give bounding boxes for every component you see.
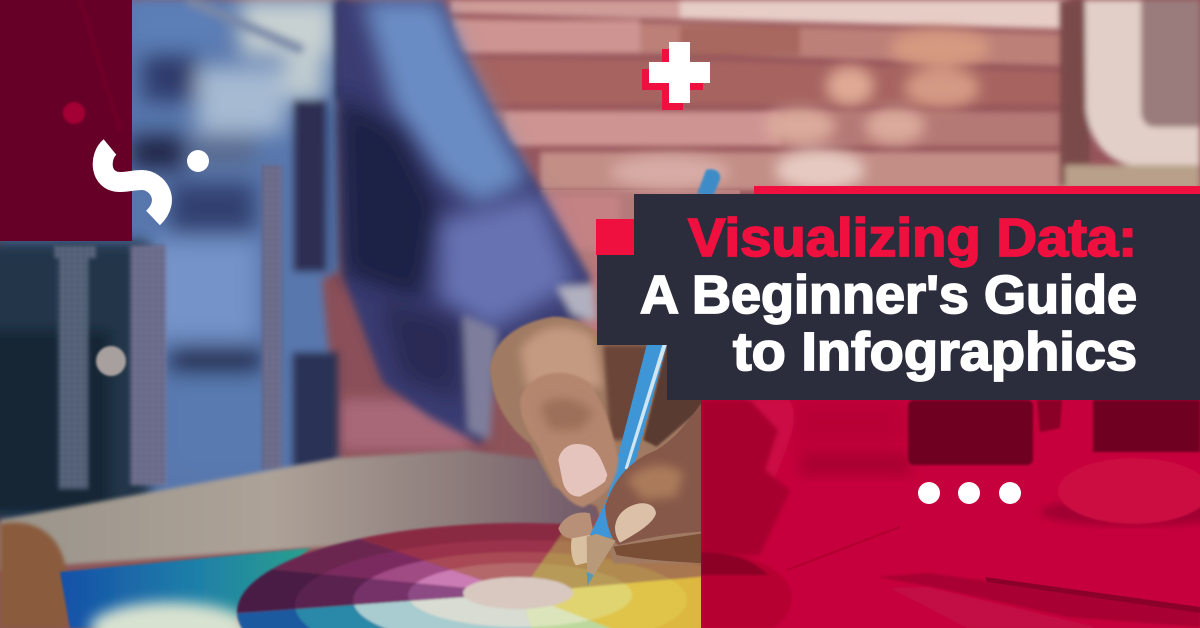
red colour block [701,400,1200,628]
shirt stitching seams [55,165,282,489]
pencil top above the panel [697,169,720,196]
denim shirt body [0,0,347,520]
hand holding the pencil [490,317,703,586]
pencil wood tip [587,534,616,586]
heading line 1: Visualizing Data: [688,208,1137,268]
title panel [597,194,1200,400]
thumbnail [615,503,656,543]
dark lower left of the shirt [0,241,150,521]
denim sleeve [335,0,596,445]
thumb [605,403,701,545]
three dots [918,482,1021,504]
index finger [520,373,618,507]
painted blue paper swatch [60,548,310,628]
back of the hand [490,317,703,563]
logo mark [103,147,209,218]
plus icon [642,42,710,110]
left hand at the table edge [0,523,68,628]
photo background: window frame at top right [1060,0,1200,190]
index fingernail [558,444,607,497]
red accent bar [754,186,1200,194]
shirt button [96,346,126,376]
colour wheel [236,522,701,628]
table surface [0,450,600,570]
rose background behind the arm [320,270,495,460]
heading lines 2 and 3: A Beginner's Guide [640,265,1137,325]
heading lines 2 and 3 [640,265,1137,382]
red accent square [596,219,634,255]
dark red block top left [0,0,132,241]
pencil [590,345,667,538]
heading lines 2 and 3: to Infographics [733,322,1137,382]
